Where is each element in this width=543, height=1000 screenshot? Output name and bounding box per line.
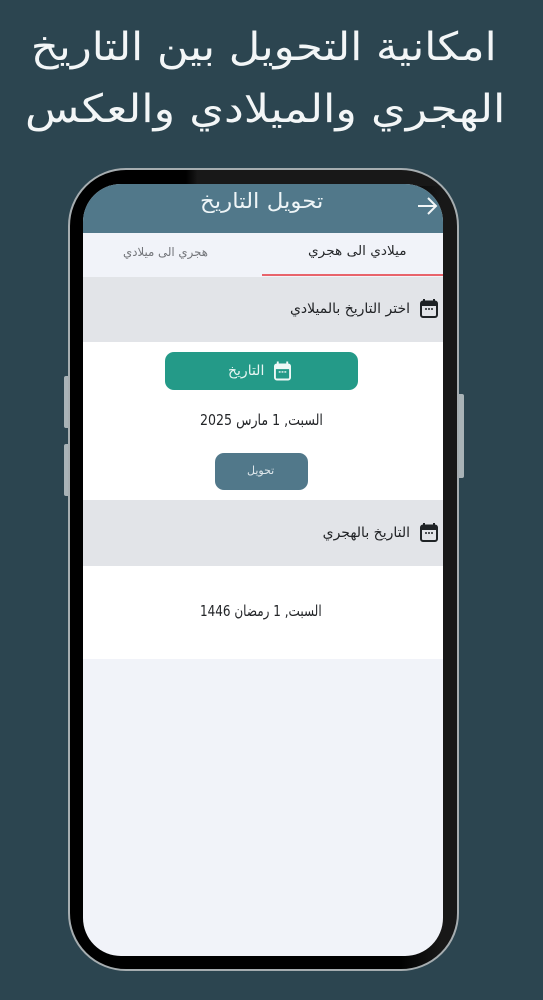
icon: calendar [274,362,291,380]
title line 2: الهجري والميلادي والعكس [25,87,505,132]
tab bar [83,233,443,277]
header title: تحويل التاريخ [200,189,323,213]
tab: Gregorian to Hijri: ميلادي الى هجري [308,244,407,259]
convert button [215,453,308,490]
phone screen [83,184,443,956]
title [25,25,505,132]
selected Gregorian date: السبت, 1 مارس 2025 [200,411,323,429]
section: Hijri date [83,500,443,566]
title line 1: امكانية التحويل بين التاريخ [31,25,497,70]
Hijri date result: السبت, 1 رمضان 1446 [200,602,322,620]
phone side button: volume up [64,376,70,428]
convert button label: تحويل [247,464,274,477]
panel: date picker [83,342,443,500]
phone frame [68,168,459,971]
icon: calendar [420,523,438,542]
icon: calendar [420,299,438,318]
app header [83,184,443,233]
tab: Hijri to Gregorian: هجري الى ميلادي [123,245,208,259]
date button [165,352,358,390]
section heading: اختر التاريخ بالميلادي [290,301,410,317]
phone side button: power [457,394,464,478]
date button label: التاريخ [228,363,264,379]
panel: Hijri result [83,566,443,659]
phone side button: volume down [64,444,70,496]
active tab underline [262,274,443,276]
icon: back arrow [418,197,438,215]
section heading: التاريخ بالهجري [323,525,410,541]
section: choose Gregorian date [83,277,443,342]
